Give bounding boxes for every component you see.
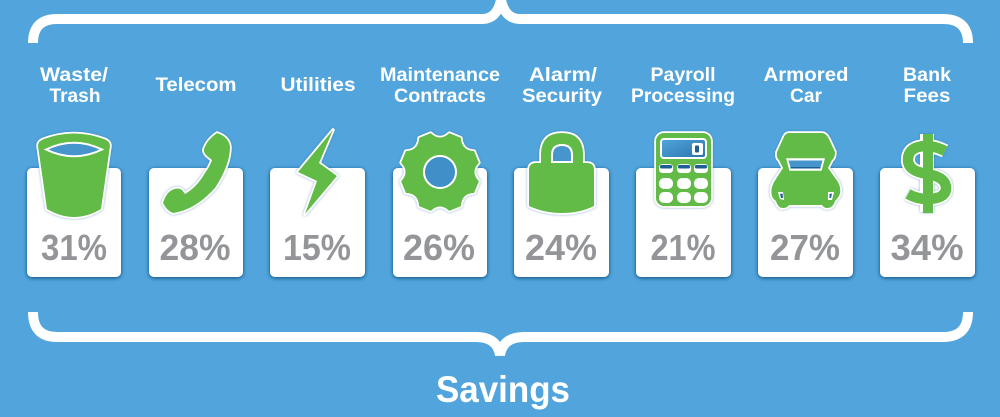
icon: calculator xyxy=(656,133,711,206)
card: waste/trash: 31% xyxy=(41,227,107,268)
card: payroll processing: 21% xyxy=(650,227,716,268)
card: payroll processing xyxy=(636,168,731,277)
label: Maintenance Contracts: Maintenance xyxy=(380,65,500,86)
card: telecom: 28% xyxy=(160,227,230,268)
label: Armored Car xyxy=(764,65,848,107)
label: Bank Fees xyxy=(903,65,951,107)
bottom brace xyxy=(33,312,968,355)
card: telecom xyxy=(149,168,243,277)
label: Waste/Trash xyxy=(40,65,109,107)
card: maintenance: 26% xyxy=(403,227,475,268)
card: utilities xyxy=(270,168,365,277)
label: Armored Car: Car xyxy=(790,86,823,107)
label: Payroll Processing: Payroll xyxy=(650,65,716,86)
label: Bank Fees: Fees xyxy=(904,86,950,107)
icon: dollar sign xyxy=(908,134,946,213)
label: Alarm/Security xyxy=(522,65,602,107)
label: Waste/Trash: Waste/ xyxy=(40,65,109,86)
heading: Savings: Savings xyxy=(436,369,570,410)
label: Alarm/Security: Alarm/ xyxy=(529,65,598,86)
icon: lightning bolt xyxy=(298,130,337,214)
top brace xyxy=(33,0,968,43)
card: bank fees xyxy=(880,168,975,277)
label: Alarm/Security: Security xyxy=(522,86,602,107)
card: alarm/security xyxy=(514,168,609,277)
icon: padlock xyxy=(529,133,594,213)
label: Armored Car: Armored xyxy=(764,65,848,86)
icon: phone xyxy=(163,133,230,213)
card: waste/trash xyxy=(27,168,121,277)
label: Payroll Processing: Processing xyxy=(631,86,735,107)
label: Telecom: Telecom xyxy=(156,75,236,96)
label: Utilities: Utilities xyxy=(280,75,356,96)
card: armored car xyxy=(758,168,853,277)
card: utilities: 15% xyxy=(283,227,351,268)
label: Bank Fees: Bank xyxy=(903,65,951,86)
icon: armored car xyxy=(771,133,840,208)
label: Maintenance Contracts: Contracts xyxy=(394,86,486,107)
icon: gear xyxy=(401,133,479,211)
icon: bucket xyxy=(38,134,110,217)
label: Waste/Trash: Trash xyxy=(50,86,100,107)
card: alarm/security: 24% xyxy=(525,227,597,268)
card: armored car: 27% xyxy=(770,227,840,268)
card: bank fees: 34% xyxy=(890,227,964,268)
label: Payroll Processing xyxy=(631,65,735,107)
label: Maintenance Contracts xyxy=(380,65,500,107)
card: maintenance xyxy=(393,168,487,277)
